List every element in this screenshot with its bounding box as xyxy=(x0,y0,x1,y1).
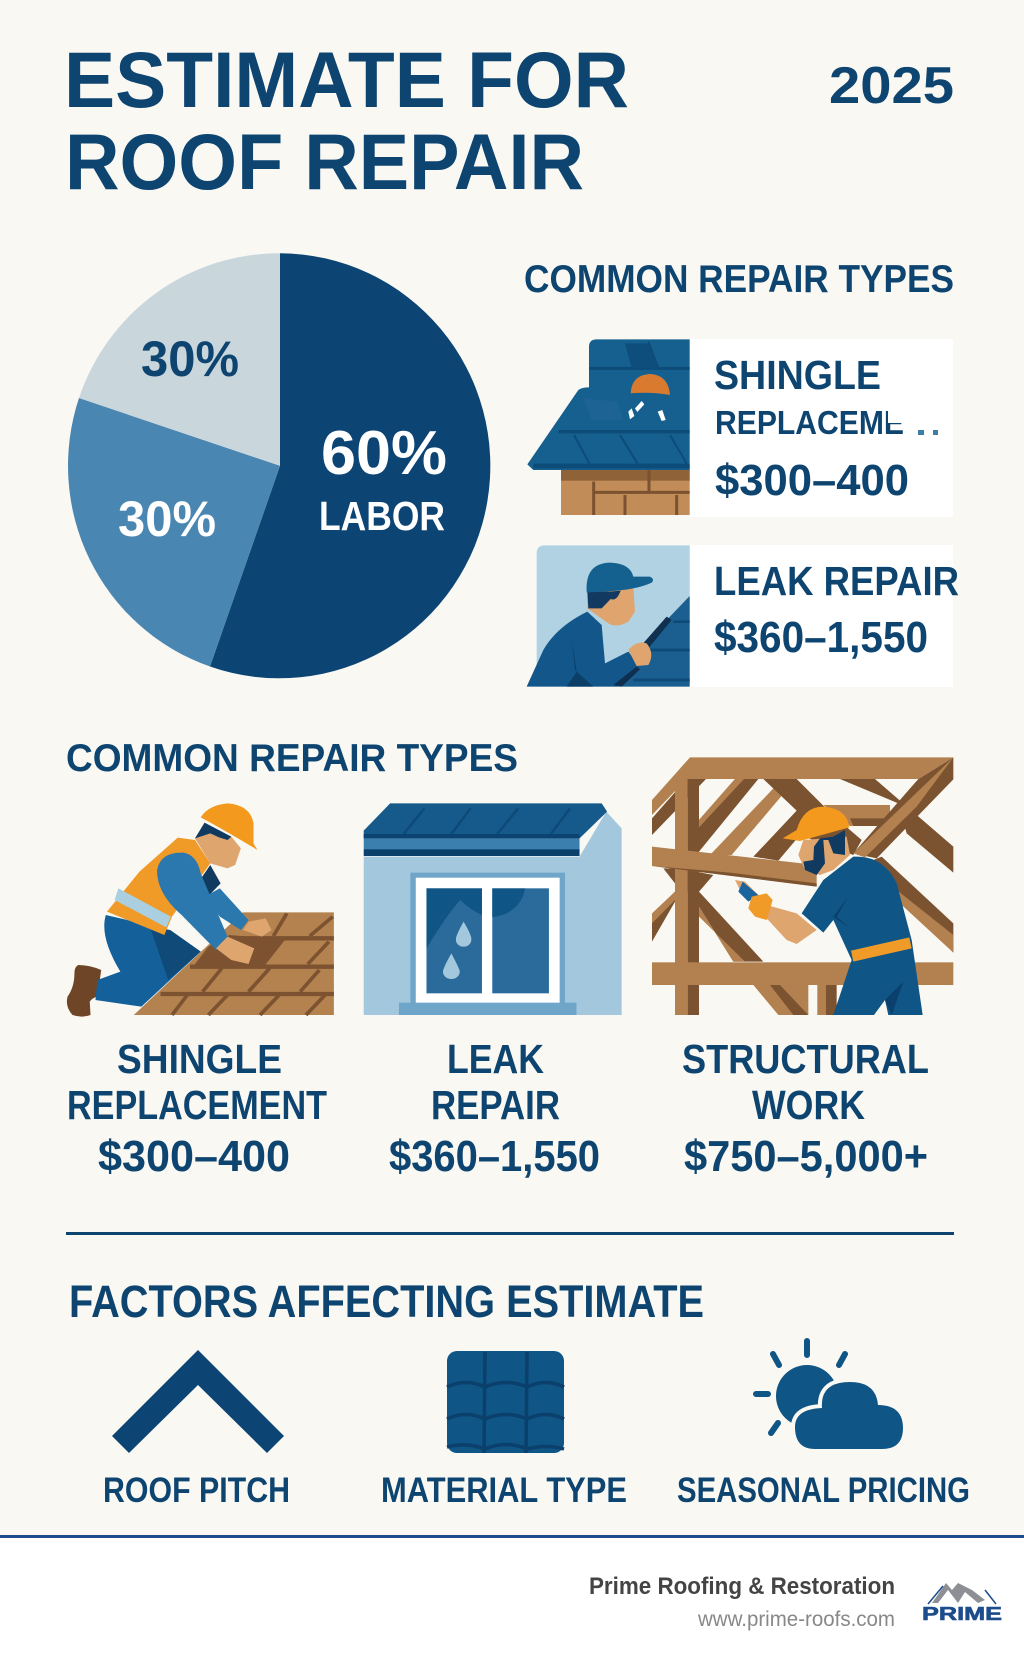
icon: roof pitch chevron xyxy=(112,1350,284,1453)
pie chart: cost breakdown xyxy=(68,253,490,678)
text: shingle replacement: REPLACEMENT xyxy=(67,1082,327,1128)
panel: leak repair column xyxy=(364,803,622,1181)
factor: seasonal pricing xyxy=(677,1341,970,1510)
icon: damaged shingle roof xyxy=(527,339,690,515)
panel: structural work column xyxy=(652,757,953,1181)
year: 2025 xyxy=(829,57,954,115)
text: structural work: STRUCTURAL xyxy=(682,1036,929,1082)
text: shingle replacement: SHINGLE xyxy=(117,1036,282,1082)
heading: common repair types (lower): COMMON REPAIR TYPES xyxy=(66,737,518,780)
factor: roof pitch: ROOF PITCH xyxy=(103,1471,290,1510)
text: leak repair xyxy=(389,1036,600,1181)
illustration: roofer laying shingles xyxy=(67,803,334,1017)
pie chart: cost breakdown: 30% xyxy=(141,331,239,387)
illustration: leaking window xyxy=(364,803,622,1015)
text: leak repair: LEAK xyxy=(447,1036,544,1082)
icon: worker inspecting roof xyxy=(527,545,690,687)
text: leak repair price: $360–1,550 xyxy=(714,613,928,662)
text: shingle replacement: $300–400 xyxy=(98,1132,290,1181)
panel: shingle replacement card xyxy=(527,339,953,517)
pie chart: cost breakdown: 60% xyxy=(321,419,447,488)
title: ESTIMATE FOR xyxy=(64,35,629,124)
logo: Prime xyxy=(922,1583,1002,1624)
text: shingle replacement price xyxy=(714,352,938,505)
text: structural work: WORK xyxy=(752,1082,865,1128)
panel: leak repair card xyxy=(527,545,959,687)
factor: seasonal pricing: SEASONAL PRICING xyxy=(677,1471,970,1510)
icon: sun and cloud xyxy=(756,1341,903,1449)
text: company name: Prime Roofing & Restoration xyxy=(589,1573,895,1600)
text: leak repair price: LEAK REPAIR xyxy=(714,558,959,604)
text: shingle replacement price: $300–400 xyxy=(715,456,909,505)
icon: roof tiles xyxy=(447,1351,564,1453)
text: shingle replacement price: SHINGLE xyxy=(714,352,881,398)
text: leak repair: REPAIR xyxy=(431,1082,560,1128)
text: shingle replacement xyxy=(67,1036,327,1181)
text: structural work xyxy=(682,1036,929,1181)
pie chart: cost breakdown: LABOR xyxy=(319,493,445,539)
title: ROOF REPAIR xyxy=(65,117,584,206)
panel: shingle replacement column xyxy=(67,803,334,1181)
factor: material type: MATERIAL TYPE xyxy=(381,1471,627,1510)
factor: material type xyxy=(381,1351,627,1510)
illustration: carpenter at roof truss xyxy=(652,757,953,1015)
heading: factors affecting estimate: FACTORS AFFECTING ESTIMATE xyxy=(69,1276,704,1327)
text: website: www.prime-roofs.com xyxy=(697,1608,895,1631)
text: leak repair: $360–1,550 xyxy=(389,1132,600,1181)
text: leak repair price xyxy=(714,558,959,662)
logo: Prime: PRIME xyxy=(922,1604,1002,1624)
text: structural work: $750–5,000+ xyxy=(684,1132,928,1181)
pie chart: cost breakdown: 30% xyxy=(118,491,216,547)
text: shingle replacement price: REPLACEME xyxy=(715,404,904,441)
footer xyxy=(0,1535,1024,1666)
factor: roof pitch xyxy=(103,1350,290,1510)
heading: common repair types (upper): COMMON REPAIR TYPES xyxy=(524,258,954,301)
title xyxy=(64,35,629,206)
